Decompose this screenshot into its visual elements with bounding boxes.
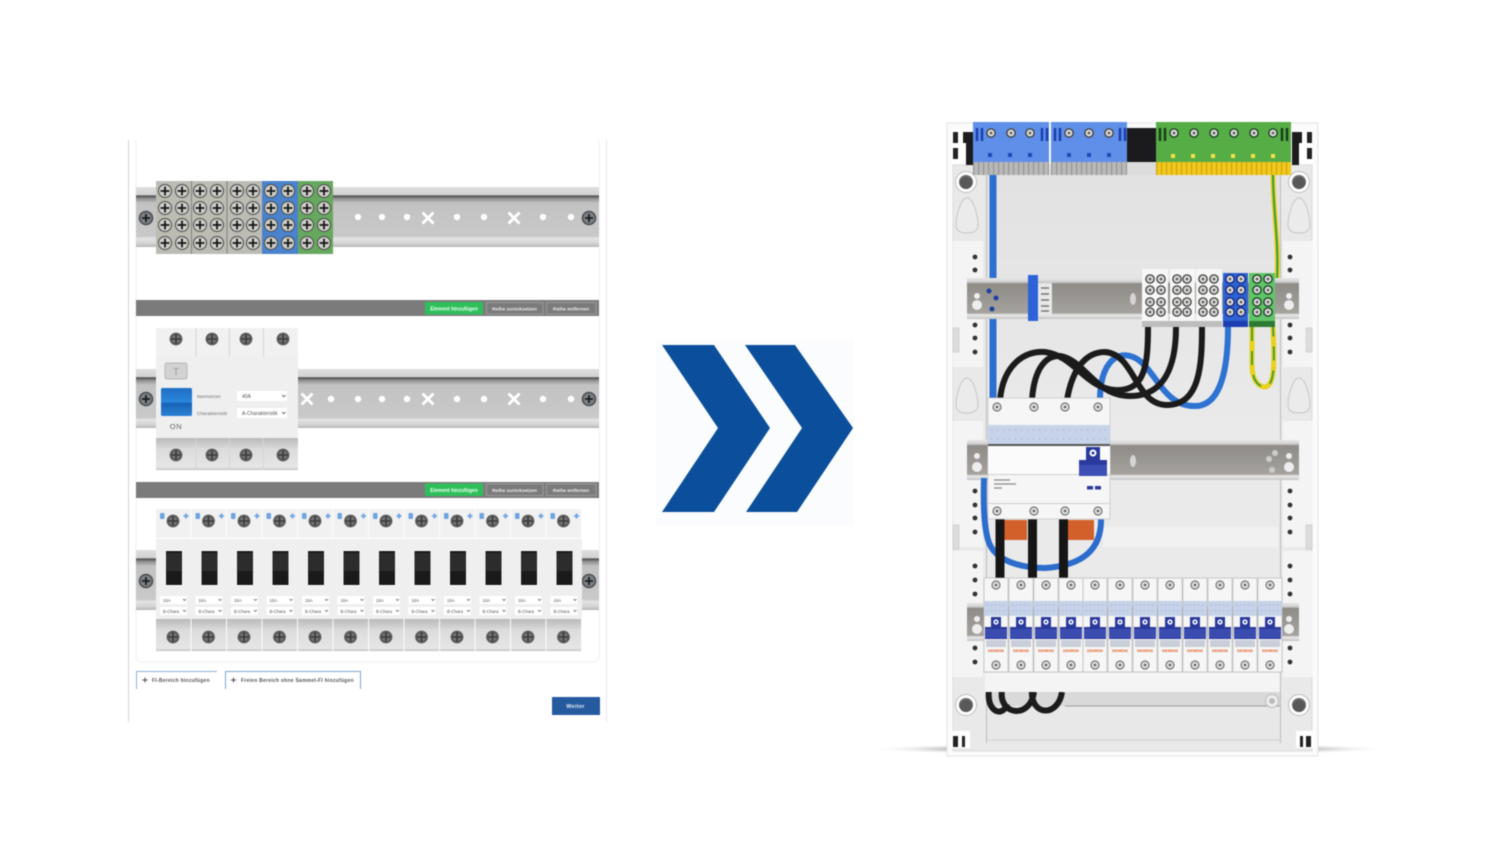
rail row 3 with twelve circuit breakers: B-Chara [412, 609, 428, 614]
devices: twelve miniature circuit breakers: SIEMENS [1112, 649, 1129, 653]
devices: twelve miniature circuit breakers: SIEMENS [1137, 649, 1154, 653]
devices: twelve miniature circuit breakers: SIEMENS [1162, 649, 1179, 653]
button: Freien Bereich ohne Sammel-FI hinzufügen: Freien Bereich ohne Sammel-FI hinzufügen [241, 678, 354, 684]
wires: black and blue loops between terminals and RCD [1000, 327, 1228, 406]
panel: configurator screen [128, 140, 607, 722]
button: FI-Bereich hinzufügen: FI-Bereich hinzufügen [152, 678, 210, 684]
rail: middle top-hat rail [967, 440, 1299, 480]
rail row 3 with twelve circuit breakers [136, 509, 599, 651]
rail row 3 with twelve circuit breakers: B-Chara [482, 609, 499, 614]
toolbar row 3 [136, 482, 599, 498]
wire: blue neutral down the left side [990, 175, 996, 400]
wires: blue and black below RCD [984, 478, 1101, 578]
toolbar row 2: Element hinzufügen [430, 306, 478, 312]
rail row 2 with residual current device: ON [170, 422, 182, 431]
rail row 3 with twelve circuit breakers: 16A [234, 598, 242, 603]
button: Weiter: Weiter [566, 704, 585, 710]
rail row 2 with residual current device: T [173, 367, 179, 378]
toolbar row 2: Reihe entfernen [553, 306, 589, 312]
devices: twelve miniature circuit breakers: SIEMENS [988, 649, 1005, 653]
rail row 3 with twelve circuit breakers: B-Chara [340, 609, 357, 614]
toolbar row 3: Reihe entfernen [553, 488, 589, 494]
rail row 3 with twelve circuit breakers: B-Chara [198, 609, 215, 614]
button: Freien Bereich ohne Sammel-FI hinzufügen [226, 672, 360, 689]
devices: twelve miniature circuit breakers: SIEMENS [1237, 649, 1254, 653]
terminal blocks on upper rail [1142, 269, 1275, 327]
rail row 3 with twelve circuit breakers: 16A [270, 598, 277, 603]
panel: finished distribution board [947, 122, 1318, 756]
rail row 3 with twelve circuit breakers: B-Chara [447, 609, 464, 614]
devices: twelve miniature circuit breakers: SIEMENS [1038, 649, 1055, 653]
rail row 3 with twelve circuit breakers: B-Chara [554, 609, 570, 614]
rail row 2 with residual current device [136, 328, 599, 470]
rail row 3 with twelve circuit breakers: 16A [376, 598, 384, 603]
rail row 2 with residual current device: Charakteristik [197, 411, 228, 416]
rail row 3 with twelve circuit breakers: B-Chara [518, 609, 535, 614]
rail row 3 with twelve circuit breakers: 16A [412, 598, 419, 603]
devices: twelve miniature circuit breakers: SIEMENS [1087, 649, 1104, 653]
busbar: blue and green terminal blocks [973, 122, 1291, 175]
wire: yellow-green earth loop [1252, 327, 1274, 387]
button: Weiter [552, 697, 600, 715]
rail row 2 with residual current device: Nennstrom [197, 394, 221, 399]
rail row 2 with residual current device: A-Charakteristik [242, 411, 278, 417]
rail row 3 with twelve circuit breakers: 16A [518, 598, 526, 603]
devices: twelve miniature circuit breakers: SIEMENS [1212, 649, 1229, 653]
rail row 3 with twelve circuit breakers: 16A [305, 598, 313, 603]
rail row 3 with twelve circuit breakers: 16A [554, 598, 561, 603]
rail: lower top-hat rail [967, 603, 1299, 641]
toolbar row 2 [136, 300, 599, 316]
rail row 3 with twelve circuit breakers: B-Chara [376, 609, 393, 614]
arrow: double chevron [656, 340, 854, 525]
rail row 3 with twelve circuit breakers: 16A [198, 598, 206, 603]
floor shadow [865, 743, 1395, 755]
toolbar row 3: Reihe zurücksetzen [492, 488, 537, 494]
rail row 3 with twelve circuit breakers: B-Chara [270, 609, 286, 614]
toolbar row 2: Reihe zurücksetzen [492, 306, 537, 312]
devices: twelve miniature circuit breakers: SIEMENS [1063, 649, 1080, 653]
rail: upper top-hat rail [967, 275, 1299, 321]
rail row 3 with twelve circuit breakers: B-Chara [163, 609, 180, 614]
rail row 3 with twelve circuit breakers: 16A [163, 598, 171, 603]
rail row 3 with twelve circuit breakers: 16A [340, 598, 348, 603]
devices: twelve miniature circuit breakers: SIEMENS [1187, 649, 1204, 653]
devices: twelve miniature circuit breakers: SIEMENS [1013, 649, 1030, 653]
rail row 3 with twelve circuit breakers: 16A [447, 598, 455, 603]
rail row 3 with twelve circuit breakers: B-Chara [305, 609, 322, 614]
rail row 2 with residual current device: 40A [242, 394, 252, 400]
wire: yellow-green earth from busbar [1273, 175, 1277, 280]
button: FI-Bereich hinzufügen [136, 672, 217, 689]
devices: twelve miniature circuit breakers [984, 578, 1282, 672]
devices: twelve miniature circuit breakers: SIEMENS [1262, 649, 1279, 653]
rail row 1 with terminals [136, 181, 599, 254]
rail row 3 with twelve circuit breakers: 16A [482, 598, 490, 603]
lower cover strip with spare cable loops [985, 673, 1280, 712]
toolbar row 3: Element hinzufügen [430, 488, 478, 494]
rail row 3 with twelve circuit breakers: B-Chara [234, 609, 251, 614]
device: residual current circuit breaker [988, 398, 1110, 519]
